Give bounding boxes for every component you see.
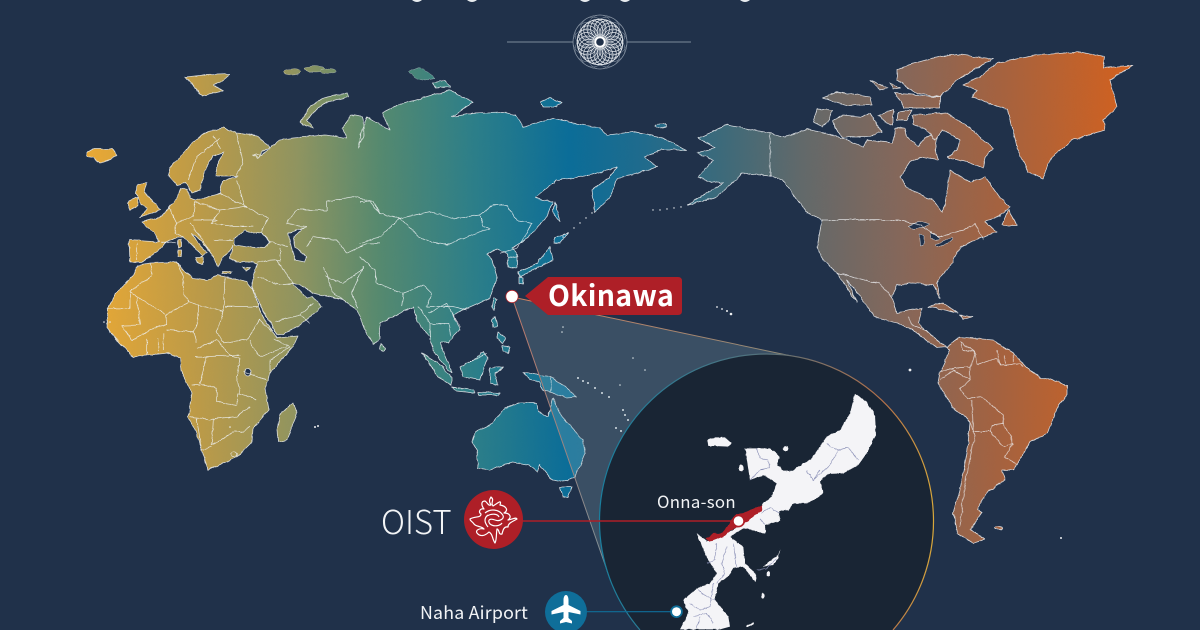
country borders <box>107 133 1023 527</box>
Japan Honshu <box>518 247 553 277</box>
callout cone from Okinawa to inset <box>512 297 801 576</box>
cropped title remnants <box>412 0 750 2</box>
icon: airplane <box>545 591 587 630</box>
Taymyr islands <box>433 80 451 88</box>
Hispaniola <box>960 315 973 319</box>
Arctic islands <box>822 80 940 125</box>
scattered Pacific and Atlantic islands <box>103 204 1062 539</box>
Baffin Island <box>913 113 993 168</box>
Southeast Asia borders <box>418 303 551 392</box>
Great Lakes <box>908 221 953 247</box>
Victoria Island <box>833 113 882 137</box>
Greenland <box>963 52 1133 178</box>
Mediterranean islands <box>178 240 250 274</box>
Ie island <box>707 437 732 447</box>
Luzon <box>492 317 498 328</box>
Iceland <box>87 149 117 163</box>
Severnaya Zemlya <box>408 67 435 80</box>
South America borders <box>940 342 1023 527</box>
North America borders <box>770 133 983 330</box>
Lake Victoria <box>245 368 251 376</box>
New Siberian Islands <box>540 98 562 107</box>
Borneo <box>460 352 488 380</box>
South America <box>938 337 1067 543</box>
ornament: divider with spirograph rosette <box>507 13 691 71</box>
East Asia borders <box>360 202 532 310</box>
Caspian Sea <box>288 228 307 262</box>
marker: Naha Airport <box>671 606 682 617</box>
Madagascar <box>277 403 297 442</box>
small islands <box>739 446 789 628</box>
municipal boundaries <box>690 444 858 629</box>
New Guinea <box>523 372 577 398</box>
Okinawa main island <box>680 393 876 629</box>
North America <box>687 125 1010 348</box>
Mindanao <box>502 345 510 353</box>
Great Britain <box>136 182 160 217</box>
Taiwan <box>492 298 497 310</box>
Sri Lanka <box>380 343 385 352</box>
Lesser Sunda <box>478 392 500 395</box>
Black Sea <box>235 230 270 248</box>
Cuba <box>928 303 958 313</box>
Eurasia <box>129 90 687 373</box>
Sulawesi <box>490 367 503 385</box>
icon: OIST emblem <box>464 490 523 549</box>
Java <box>452 387 475 393</box>
label: Onna-son: Onna-son <box>657 489 736 513</box>
Visayas <box>497 332 506 343</box>
Africa <box>107 262 298 470</box>
Onna-son highlighted region <box>706 505 762 542</box>
label: Naha Airport: Naha Airport <box>420 599 528 625</box>
label: OIST: OIST <box>381 496 452 544</box>
Novaya Zemlya <box>300 93 348 128</box>
Ireland <box>127 197 139 211</box>
connector: Naha Airport <box>585 611 672 613</box>
inset circle: Okinawa island <box>600 354 934 630</box>
Ellesmere Island <box>897 54 993 97</box>
Australia <box>472 398 585 482</box>
callout: Okinawa: Okinawa <box>548 274 674 315</box>
Africa and Middle East borders <box>107 260 363 457</box>
Japan Hokkaido <box>553 233 568 243</box>
Svalbard <box>185 74 230 96</box>
Tasmania <box>560 487 572 497</box>
Banks Island <box>813 109 832 126</box>
marker: Onna-son <box>733 515 744 527</box>
Sakhalin <box>553 202 560 222</box>
world map <box>87 52 1133 543</box>
connector: OIST to Onna-son <box>520 520 735 522</box>
Newfoundland <box>1002 210 1017 225</box>
Falkland Islands <box>995 526 1003 530</box>
Franz Josef Land <box>283 66 336 75</box>
Oura bay <box>778 458 792 471</box>
marker: Okinawa location <box>506 290 518 303</box>
Europe and Western Asia borders <box>137 133 380 262</box>
Wrangel Island <box>655 124 667 128</box>
Sumatra <box>422 353 452 385</box>
Kyushu <box>519 277 523 284</box>
